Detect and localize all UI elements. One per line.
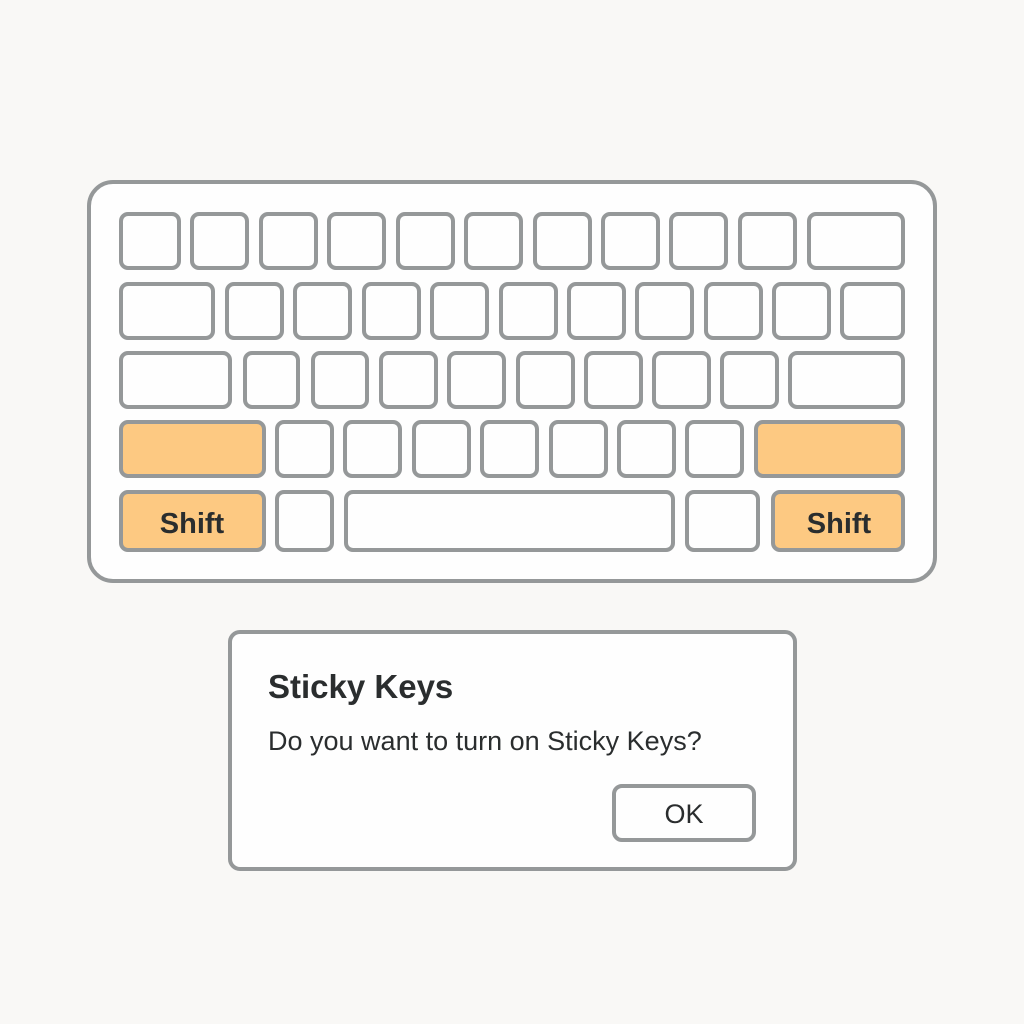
right shift label: Shift [807, 508, 872, 540]
row 3 keys [121, 353, 903, 407]
dialog [230, 632, 795, 869]
keyboard [89, 182, 935, 581]
row 5 keys [121, 492, 903, 550]
dialog message: Do you want to turn on Sticky Keys? [268, 726, 702, 756]
row 2 keys [121, 284, 903, 338]
left shift label: Shift [160, 508, 225, 540]
OK button: OK [664, 799, 704, 829]
dialog title: Sticky Keys [268, 668, 453, 705]
row 1 keys [121, 214, 903, 268]
row 4 keys [121, 422, 903, 476]
OK button [614, 786, 754, 840]
